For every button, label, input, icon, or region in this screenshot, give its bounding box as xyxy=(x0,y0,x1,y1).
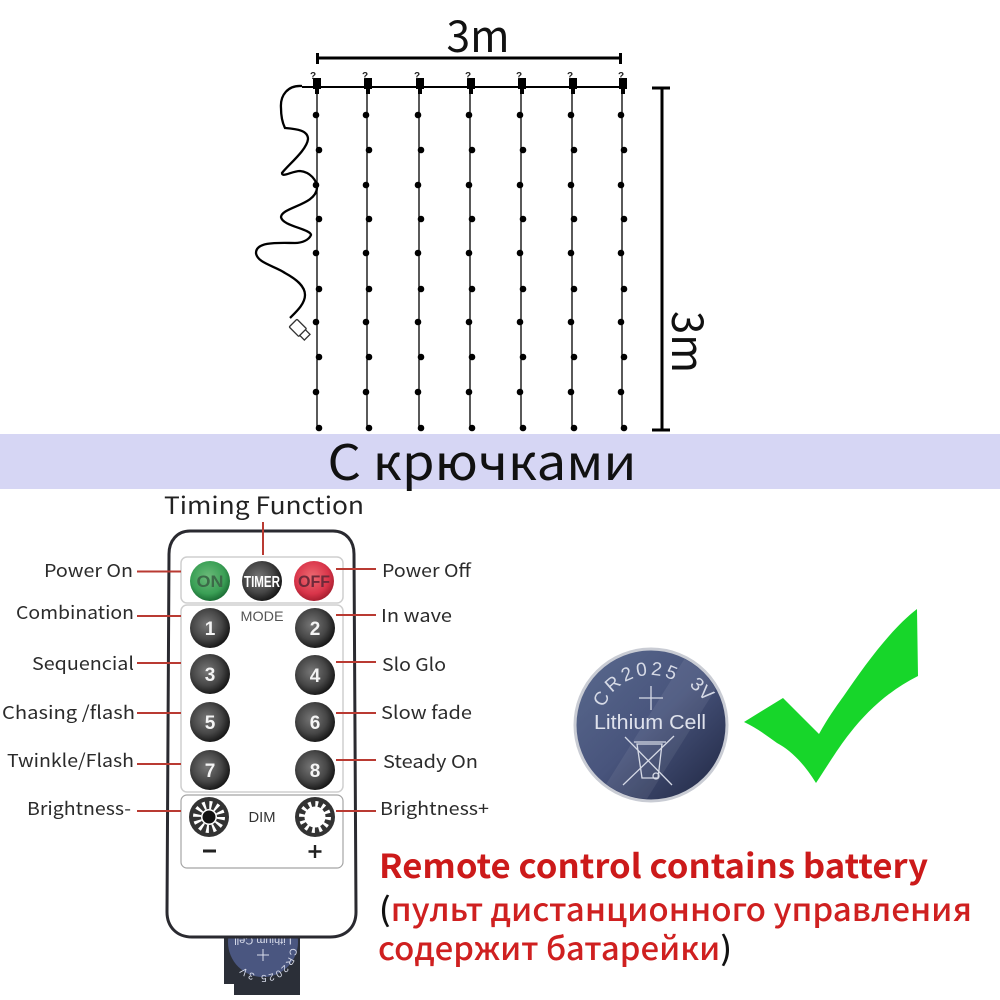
button: 5 xyxy=(190,702,230,742)
USB cable xyxy=(256,86,317,341)
battery note text xyxy=(378,840,972,970)
button: ON: ON xyxy=(196,572,224,591)
battery in tray: CR2025 3V xyxy=(239,948,297,982)
CR2025 coin battery: CR2025 xyxy=(594,662,678,705)
CR2025 coin battery: 3V xyxy=(685,674,718,706)
callout labels left: Combination xyxy=(16,599,134,625)
button: 4: 4 xyxy=(310,666,321,687)
light curtain diagram: ? xyxy=(465,71,471,82)
battery in tray: Lithium Cell xyxy=(234,934,292,946)
light curtain diagram xyxy=(302,71,627,431)
power panel outline xyxy=(181,557,343,603)
button: dim minus xyxy=(189,797,229,837)
width dimension: 3m xyxy=(316,1,622,65)
callout labels right: Brightness+ xyxy=(380,795,489,821)
height dimension: 3m xyxy=(652,88,723,430)
callout labels left: Power On xyxy=(44,557,133,583)
button: 7: 7 xyxy=(205,761,215,782)
battery note text: Remote control contains battery xyxy=(379,840,928,888)
button: 1: 1 xyxy=(205,619,216,640)
dim panel outline xyxy=(181,795,343,868)
button: TIMER: TIMER xyxy=(244,574,280,591)
button: 8: 8 xyxy=(310,761,320,782)
button: 5: 5 xyxy=(205,713,216,734)
button: 8 xyxy=(295,750,335,790)
callout labels right: In wave xyxy=(381,602,452,628)
button: 7 xyxy=(190,750,230,790)
CR2025 coin battery xyxy=(574,648,728,802)
banner band: С крючками xyxy=(328,424,636,495)
light curtain diagram: ? xyxy=(516,71,522,82)
button: 1 xyxy=(190,608,230,648)
button: 6: 6 xyxy=(310,713,320,734)
minus sign xyxy=(203,850,216,852)
battery note text: (пульт дистанционного управления xyxy=(379,885,972,931)
button: 2 xyxy=(295,608,335,648)
battery in tray xyxy=(224,938,300,995)
button: 3: 3 xyxy=(205,665,215,686)
button: OFF xyxy=(294,561,334,601)
button: dim plus xyxy=(295,797,335,837)
height dimension: 3m: 3m xyxy=(659,311,723,373)
banner band xyxy=(0,424,1000,495)
light curtain diagram: ? xyxy=(567,71,573,82)
mode panel outline xyxy=(181,605,343,792)
callout labels right: Power Off xyxy=(382,557,473,583)
button: 6 xyxy=(295,702,335,742)
callout labels right: Slow fade xyxy=(381,699,472,725)
callout labels right: Steady On xyxy=(383,748,478,774)
battery note text: содержит батарейки ) xyxy=(378,924,732,970)
light curtain diagram: ? xyxy=(618,71,624,82)
button: TIMER xyxy=(242,561,282,601)
callout labels left: Brightness- xyxy=(27,795,131,821)
callout labels right xyxy=(336,557,489,821)
DIM label: DIM xyxy=(248,809,276,826)
remote body xyxy=(167,531,356,937)
mode label: MODE xyxy=(240,608,284,624)
light curtain diagram: ? xyxy=(362,71,368,82)
width dimension: 3m: 3m xyxy=(446,1,510,65)
plus sign xyxy=(308,845,322,858)
callout labels left: Chasing /flash xyxy=(2,699,135,725)
timing function label: Timing Function xyxy=(164,486,364,521)
remote control xyxy=(166,530,358,995)
button: ON xyxy=(190,561,230,601)
recycle bin crossed icon xyxy=(623,736,674,785)
button: 2: 2 xyxy=(310,619,320,640)
light curtain diagram: ? xyxy=(310,71,316,82)
callout labels left: Twinkle/Flash xyxy=(7,747,134,773)
green check mark xyxy=(744,609,918,783)
button: OFF: OFF xyxy=(298,572,330,591)
callout labels left xyxy=(2,557,181,821)
button: 3 xyxy=(190,654,230,694)
callout labels left: Sequencial xyxy=(32,650,134,676)
light curtain diagram: ? xyxy=(414,71,420,82)
CR2025 coin battery: Lithium Cell xyxy=(594,712,706,734)
button: 4 xyxy=(295,655,335,695)
callout labels right: Slo Glo xyxy=(382,651,446,677)
